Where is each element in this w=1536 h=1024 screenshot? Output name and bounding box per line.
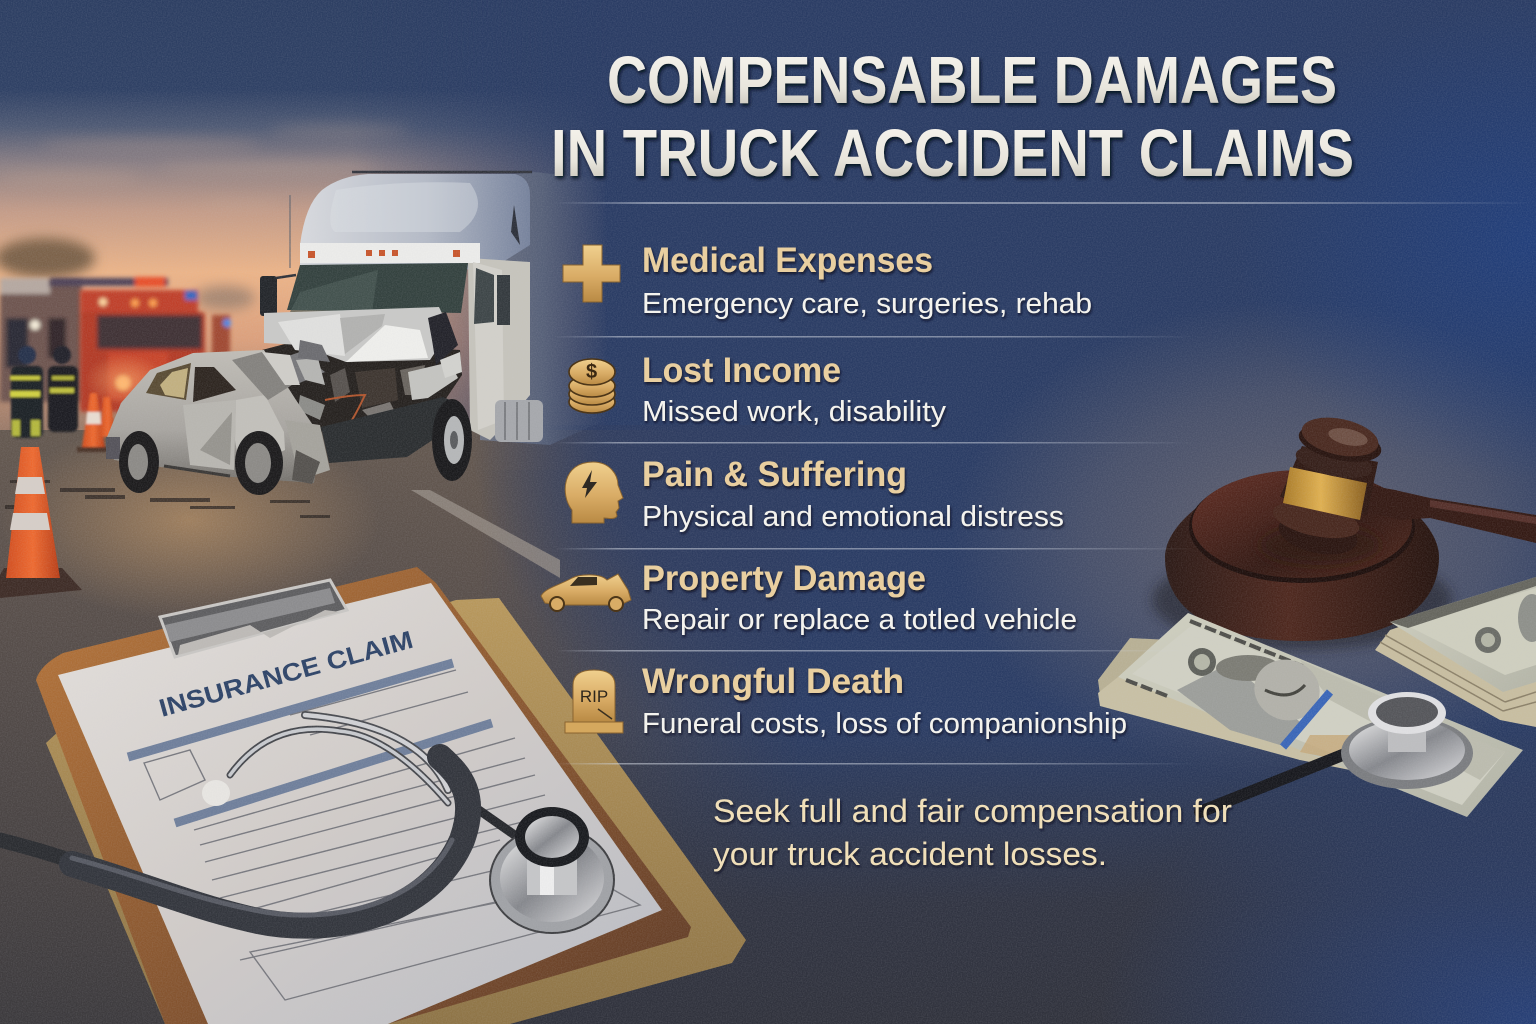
truck cab xyxy=(260,172,543,442)
form lines xyxy=(144,670,640,1000)
icon: coin stack: $ xyxy=(586,361,597,383)
distant trees xyxy=(0,238,255,310)
paper xyxy=(58,583,662,1024)
description: Physical and emotional distress xyxy=(642,501,1064,533)
portrait xyxy=(1177,651,1328,745)
closing statement: your truck accident losses. xyxy=(713,836,1107,872)
description: Emergency care, surgeries, rehab xyxy=(642,288,1092,320)
gavel and sound block xyxy=(1152,411,1536,650)
icon: RIP gravestone xyxy=(565,670,623,733)
form bars xyxy=(128,663,492,823)
small traffic cones xyxy=(77,393,116,452)
chestpiece xyxy=(1341,717,1473,789)
mirror xyxy=(260,276,277,316)
back stack of bills xyxy=(1375,577,1536,727)
board xyxy=(36,567,691,1024)
truck bumper xyxy=(321,397,452,463)
cash stacks and stethoscope xyxy=(1098,577,1536,817)
closing statement xyxy=(713,793,1232,872)
icon: medical cross xyxy=(563,245,620,302)
item: pain and suffering xyxy=(565,455,1064,533)
item: lost income xyxy=(569,351,947,428)
side door xyxy=(473,262,504,430)
handle xyxy=(1368,485,1536,543)
heading: Wrongful Death xyxy=(642,662,904,701)
icon: head with lightning bolt xyxy=(565,462,623,523)
trailer xyxy=(480,172,605,445)
gavel head xyxy=(1270,411,1385,561)
rear emergency vehicle xyxy=(0,278,82,402)
icon: coin stack xyxy=(569,359,615,413)
title: IN TRUCK ACCIDENT CLAIMS xyxy=(551,116,1354,191)
closing statement: Seek full and fair compensation for xyxy=(713,793,1232,829)
sound block xyxy=(1165,472,1439,641)
blue security strip xyxy=(1283,692,1330,747)
accident scene xyxy=(0,172,605,598)
heading: Pain & Suffering xyxy=(642,455,907,494)
item: medical expenses xyxy=(563,241,1092,320)
heading: Property Damage xyxy=(642,559,926,598)
heading: Lost Income xyxy=(642,351,841,390)
icon: damaged car xyxy=(541,574,631,611)
clipboard with insurance claim xyxy=(0,567,746,1024)
road debris and lane line xyxy=(5,480,560,578)
stethoscope tube xyxy=(1200,748,1360,812)
seal xyxy=(1188,648,1216,676)
wrecked engine xyxy=(262,340,462,432)
item: property damage xyxy=(541,559,1077,636)
car wheels xyxy=(119,431,159,493)
large traffic cone xyxy=(0,447,82,598)
clip xyxy=(160,580,347,657)
crumpled hood xyxy=(264,307,462,378)
description: Funeral costs, loss of companionship xyxy=(642,708,1127,740)
stethoscope chestpiece xyxy=(490,807,614,933)
title xyxy=(551,43,1354,191)
front stack of bills xyxy=(1098,638,1470,760)
windshield xyxy=(287,263,468,313)
firefighters xyxy=(10,346,78,438)
heading: Medical Expenses xyxy=(642,241,933,280)
item: wrongful death xyxy=(565,662,1127,740)
truck wheel xyxy=(432,399,472,481)
description: Missed work, disability xyxy=(642,396,947,428)
title: COMPENSABLE DAMAGES xyxy=(607,43,1337,118)
dividers xyxy=(555,202,1536,764)
fuel tank xyxy=(495,400,543,442)
icon: RIP gravestone: RIP xyxy=(580,687,608,706)
description: Repair or replace a totled vehicle xyxy=(642,604,1077,636)
fire truck xyxy=(50,277,231,412)
form title: INSURANCE CLAIM xyxy=(156,626,416,723)
stethoscope on clipboard xyxy=(0,715,516,926)
tan folder xyxy=(46,598,746,1024)
cab lower side xyxy=(468,258,530,440)
stethoscope eartip xyxy=(202,780,230,806)
silver car xyxy=(106,350,330,495)
